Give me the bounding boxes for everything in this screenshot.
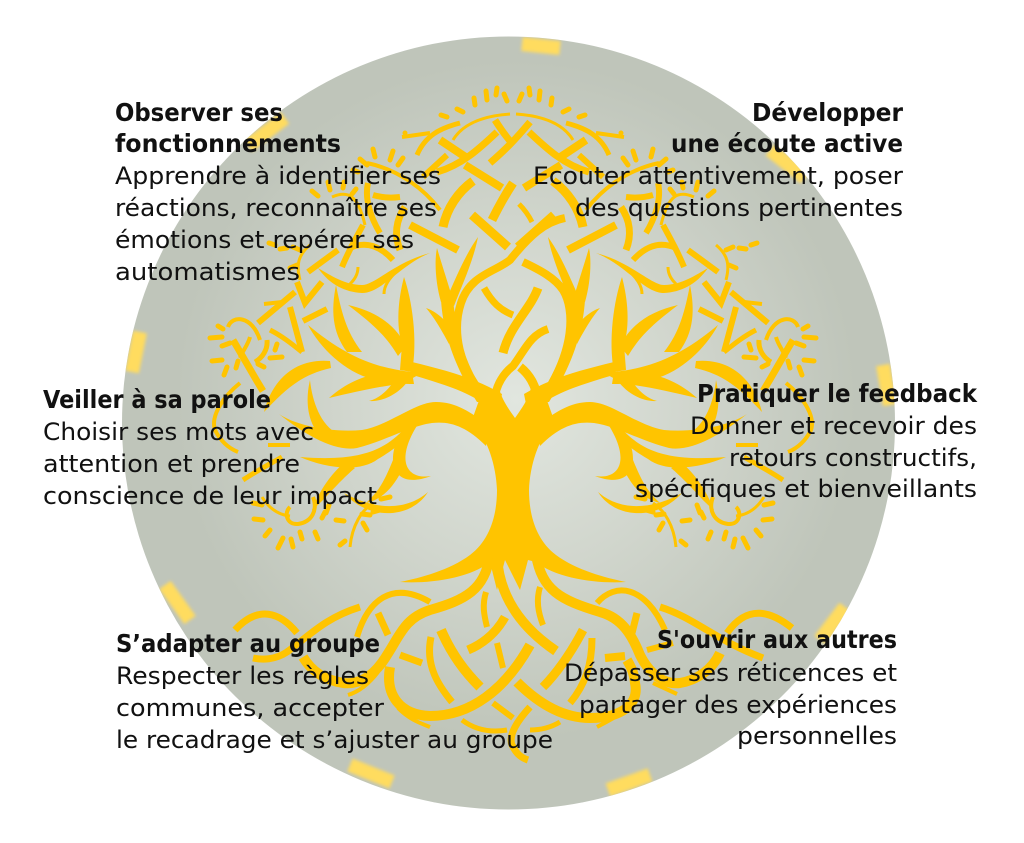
text: s'ouvrir aux autres: personnelles [737, 722, 897, 750]
text: développer une écoute active: une écoute active [671, 129, 903, 158]
text: observer ses fonctionnements: automatismes [115, 258, 300, 286]
text: s'adapter au groupe: Respecter les règles [116, 662, 369, 690]
text: veiller à sa parole: conscience de leur impact [43, 482, 377, 510]
text: développer une écoute active: Ecouter attentivement, poser [533, 162, 903, 190]
tree: central twisted branches [457, 120, 570, 400]
text: observer ses fonctionnements [115, 98, 441, 286]
text: s'adapter au groupe [116, 629, 553, 754]
text: pratiquer le feedback: Donner et recevoir des [690, 412, 977, 440]
rim highlights [132, 44, 890, 790]
text: veiller à sa parole: Veiller à sa parole [43, 385, 271, 414]
text: s'ouvrir aux autres: partager des expériences [579, 691, 897, 719]
text: pratiquer le feedback: Pratiquer le feedback [697, 379, 978, 408]
text: développer une écoute active: des questions pertinentes [575, 194, 903, 222]
tree: left crown [210, 88, 510, 548]
tree: trunk [400, 388, 626, 590]
text: observer ses fonctionnements: émotions et repérer ses [115, 226, 414, 254]
tree: roots [235, 555, 792, 760]
text: pratiquer le feedback [635, 379, 978, 503]
text: veiller à sa parole: Choisir ses mots avec [43, 418, 314, 446]
text: observer ses fonctionnements: fonctionnements [115, 129, 341, 158]
text: développer une écoute active: Développer [752, 98, 904, 127]
text: s'adapter au groupe: communes, accepter [116, 694, 384, 722]
text: observer ses fonctionnements: Apprendre à identifier ses [115, 162, 441, 190]
text: s'adapter au groupe: S’adapter au groupe [116, 629, 380, 658]
background circle [122, 36, 895, 810]
text: observer ses fonctionnements: réactions, reconnaître ses [115, 194, 437, 222]
text: veiller à sa parole [43, 385, 377, 510]
text: s'ouvrir aux autres: S'ouvrir aux autres [657, 625, 897, 654]
text: s'ouvrir aux autres [564, 625, 897, 750]
text: veiller à sa parole: attention et prendre [43, 450, 300, 478]
text: observer ses fonctionnements: Observer ses [115, 98, 283, 127]
text: s'adapter au groupe: le recadrage et s’ajuster au groupe [116, 726, 553, 754]
tree: right crown (mirrored) [516, 88, 816, 548]
text: s'ouvrir aux autres: Dépasser ses réticences et [564, 659, 897, 687]
text: développer une écoute active [533, 98, 904, 222]
text: pratiquer le feedback: retours constructifs, [729, 444, 977, 472]
text: pratiquer le feedback: spécifiques et bienveillants [635, 475, 977, 503]
tree illustration [210, 88, 816, 760]
